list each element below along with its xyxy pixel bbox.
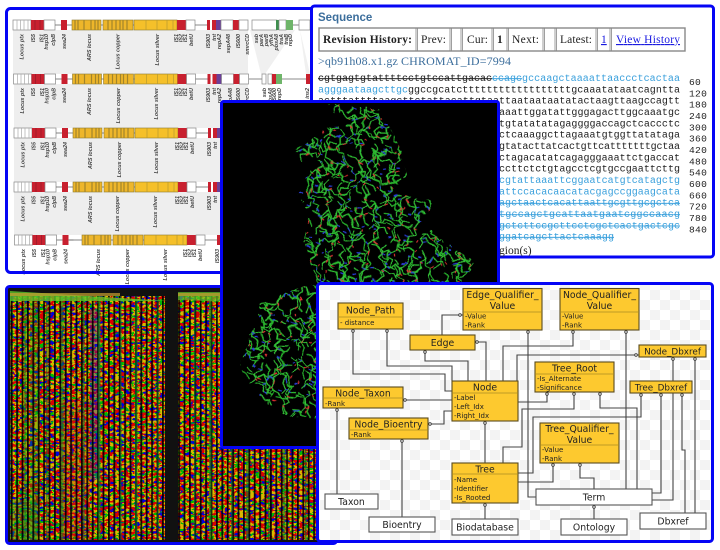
revision history table: Prev: (421, 34, 446, 46)
table: Tree: -Is_Rooted (454, 494, 490, 502)
row 4: tnt (213, 196, 219, 203)
row 2: IS600 (236, 88, 242, 102)
row 4: IS1 (40, 196, 46, 204)
row 2: IS903 (206, 88, 212, 102)
base position numbers: 780 (689, 213, 707, 224)
row 5: IS2 (188, 249, 194, 257)
row 2: pbsA8 (268, 88, 274, 105)
row 3: sea24 (63, 142, 69, 157)
sequence lines: tgccagctgcattaatgaatcggccaacg (499, 210, 680, 221)
row 1: parB (264, 34, 270, 47)
base position numbers: 180 (689, 100, 707, 111)
sequence lines: ggatcagcttactcaaagg (499, 233, 614, 244)
base position numbers: 120 (689, 88, 707, 99)
sequence lines: gccaagctaaaattaaccctcactaa (522, 74, 680, 85)
table: Term (536, 489, 652, 505)
table: Tree_Dbxref: Tree_Dbxref (634, 384, 688, 394)
row 3: Locus ptx (20, 141, 26, 167)
row 4: ARS locus (88, 196, 94, 224)
row 2: IS1 (183, 88, 189, 96)
row 4: IS903 (207, 196, 213, 210)
row 2: tnt (212, 88, 218, 95)
table: Taxon: Taxon (337, 497, 365, 508)
row 2: smrcCD (245, 88, 251, 109)
table: Dbxref: Dbxref (657, 516, 689, 528)
base position numbers (689, 77, 707, 236)
table: Node_Dbxref: Node_Dbxref (644, 348, 702, 358)
row 5: ARS locus (96, 249, 102, 277)
row 4: Locus ptx (20, 195, 26, 221)
table: Node_Taxon: Node_Taxon (335, 388, 391, 400)
sequence lines (318, 74, 680, 244)
row 4: clpB (52, 196, 58, 208)
sequence lines: ccagc (492, 74, 522, 85)
sequence lines: actttattttaagcttctattacattgtaattaataataatatactaagttaagccagtt (318, 97, 680, 108)
fasta header: >qb91h08.x1.gz CHROMAT_ID=7994 (318, 54, 511, 68)
table: Edge_Qualifier_Value: Value (490, 301, 516, 312)
row 3: ARS locus (88, 142, 94, 170)
row 1: IS1 (40, 34, 46, 42)
sequence lines: ctcaaaggcttagaaatgtggttatataga (499, 131, 680, 142)
row 4: hsp10 (45, 196, 51, 212)
row 3 (14, 128, 249, 177)
row 1: traB (284, 34, 290, 45)
table: Tree: -Name (454, 476, 477, 484)
row 4: Locus copper (115, 195, 121, 231)
row 1: Locus ptx (20, 33, 26, 59)
table: Node_Dbxref (639, 345, 706, 358)
row 1 (13, 20, 310, 69)
row 2: Locus ptx (20, 87, 26, 113)
grey homology bands (13, 30, 248, 235)
table: Node: -Right_Idx (454, 412, 489, 420)
row 3: IS2 (180, 142, 186, 150)
revision history table: 1 (497, 34, 503, 46)
protein lower lobe (240, 285, 325, 420)
row 5: hsp10 (46, 249, 52, 265)
row 2: ins2 (305, 88, 311, 99)
heatmap cells (10, 291, 318, 540)
panel: sequence record (312, 6, 714, 257)
connector end markers (336, 314, 696, 508)
row 2: sab (262, 87, 268, 97)
base position numbers: 840 (689, 224, 707, 236)
table: Node_Qualifier_Value: -Value (562, 312, 583, 320)
sequence lines: tgtatatatagaggggaccagctcaccctc (499, 119, 680, 130)
table: Node_Bioentry (349, 418, 428, 439)
base position numbers: 720 (689, 202, 707, 213)
table: Tree (452, 463, 518, 503)
row 1: Locus silver (155, 33, 161, 65)
row 1: Locus copper (116, 33, 122, 69)
table: Tree_Root: -Is_Alternate (537, 375, 581, 383)
row 5: IS1 (41, 249, 47, 257)
table: Bioentry: Bioentry (382, 520, 422, 531)
table: Term: Term (582, 492, 605, 504)
row 4 (14, 182, 249, 231)
row 1: IS1 (174, 34, 180, 42)
row 4: sea24 (63, 196, 69, 211)
row 2: IS5 (31, 87, 37, 96)
row 2: betU (189, 88, 195, 100)
row 1: IS903 (206, 34, 212, 48)
sequence lines: ctagacatatcagagggaaattctgaccat (499, 153, 680, 164)
table: Tree_Qualifier_Value (540, 423, 619, 463)
row 5 (14, 235, 258, 284)
table: Tree_Root: Tree_Root (551, 364, 597, 374)
sequence lines: ggccgcatcttttttttttttttttttgcaaatataatcagntta (408, 85, 680, 96)
row 4: betU (190, 196, 196, 208)
table: Biodatabase: Biodatabase (456, 522, 514, 534)
table: Edge (410, 335, 475, 350)
row 2: repA2 (217, 88, 223, 103)
sequence lines: aaattggatattgggagacttggcaaatgc (499, 108, 680, 119)
sequence lines: agggaataagcttgc (318, 85, 408, 96)
row 1: IS600 (236, 34, 242, 48)
table: Dbxref (640, 513, 706, 529)
table: Edge_Qualifier_Value: Edge_Qualifier_ (466, 290, 539, 301)
row 4: IS1 (184, 196, 190, 204)
panel: entity relationship diagram (318, 284, 712, 542)
base position numbers: 480 (689, 156, 707, 167)
sequence lines: gtatacttatcactgttcatttttttgctaa (499, 142, 680, 153)
sequence lines: agctaactcacattaattgcgttgcgctca (499, 199, 680, 210)
row 1: tnt (212, 34, 218, 41)
row 1: sab (254, 33, 260, 43)
panel border (6, 8, 318, 272)
table: Tree: Tree (474, 464, 495, 476)
sequence lines: cgtattaaattcggaatcatgtcatagctg (499, 176, 680, 187)
revision history table: Cur: (467, 34, 488, 46)
row 4: IS5 (32, 195, 38, 204)
table: Node_Qualifier_Value: Node_Qualifier_ (563, 290, 636, 301)
panel: protein structure (222, 102, 498, 448)
table: Node_Taxon: -Rank (325, 400, 346, 408)
row 2 (14, 74, 311, 123)
row 2: IS1 (40, 88, 46, 96)
table: Edge_Qualifier_Value (463, 288, 542, 330)
table: Tree_Root: -Significance (537, 384, 582, 392)
row 3: IS5 (32, 141, 38, 150)
row 2: IS600 (272, 88, 278, 102)
table: Biodatabase (452, 519, 518, 535)
row 1: IS1 (183, 34, 189, 42)
row 5: Locus ptx (21, 248, 27, 274)
table: Node_Path (338, 303, 403, 329)
table: Tree_Qualifier_Value: Tree_Qualifier_ (544, 424, 614, 435)
protein upper lobe (290, 107, 477, 283)
row 4: IS1 (175, 196, 181, 204)
row 3: IS903 (207, 142, 213, 156)
row 1: pbsA8 (274, 34, 280, 51)
row 1: smrcCD (245, 34, 251, 55)
base position numbers: 60 (689, 77, 701, 88)
panel: expression heatmap (6, 286, 336, 544)
row 2: sea24 (62, 88, 68, 103)
row 2: Locus silver (154, 87, 160, 119)
row 2: hsp10 (44, 88, 50, 104)
row 5: sea24 (64, 249, 70, 264)
table: Edge_Qualifier_Value: -Rank (465, 322, 486, 330)
table: Tree_Root (535, 362, 614, 392)
row 3: Locus copper (117, 141, 123, 177)
row 2: Locus copper (116, 87, 122, 123)
row 1: IS5 (31, 33, 37, 42)
base position numbers: 540 (689, 168, 707, 179)
row 3: hsp10 (45, 142, 51, 158)
row 1: clpB (51, 34, 57, 46)
table: Tree_Qualifier_Value: -Value (542, 446, 563, 454)
region note: gion(s) (499, 245, 532, 257)
table: Node_Path: Node_Path (346, 306, 395, 316)
row 3: betU (190, 142, 196, 154)
row 1: ARS locus (87, 34, 93, 62)
table: Node_Qualifier_Value: Value (587, 301, 613, 312)
row 2: clpB (52, 88, 58, 100)
table: Node_Bioentry: Node_Bioentry (354, 420, 423, 430)
table: Node: -Left_Idx (454, 403, 484, 411)
row 3: clpB (52, 142, 58, 154)
row 3: tnt (213, 142, 219, 149)
row 5: clpB (52, 249, 58, 261)
row 1: sepA48 (226, 34, 232, 53)
table: Edge: Edge (431, 338, 454, 349)
table: Tree: -Identifier (454, 485, 488, 493)
table: Bioentry (369, 517, 435, 532)
row 1: sea24 (62, 34, 68, 49)
row 5: IS903 (215, 249, 221, 263)
panel border (6, 286, 336, 544)
row 5: IS5 (32, 248, 38, 257)
revision history table (319, 28, 685, 51)
revision history table: 1 (601, 34, 607, 46)
table: Node_Bioentry: -Rank (351, 431, 372, 439)
table: Tree_Qualifier_Value: Value (567, 435, 593, 446)
row 4: Locus silver (153, 195, 159, 227)
row 1: repD (288, 34, 294, 46)
table: Node_Qualifier_Value: -Rank (562, 322, 583, 330)
row 5: Locus copper (125, 248, 131, 284)
base position numbers: 600 (689, 179, 707, 190)
base position numbers: 300 (689, 122, 707, 133)
base position numbers: 420 (689, 145, 707, 156)
connectors (337, 315, 695, 519)
table: Node_Taxon (323, 387, 403, 408)
sequence heading: Sequence (318, 12, 372, 24)
revision history table: View History (616, 34, 680, 46)
table: Node: Node (473, 382, 497, 394)
table: Taxon (325, 494, 378, 509)
table: Tree_Dbxref (630, 381, 692, 394)
sequence lines: cgtgagtgtattttcctgtccattgacac (318, 74, 492, 85)
sequence lines: gctcttccgcttcctcgctcactgactcgc (499, 221, 680, 232)
row 2: sepA48 (228, 88, 234, 107)
row 1: yfhA (269, 34, 275, 47)
row 5: IS1 (192, 249, 198, 257)
row 2: ARS locus (87, 88, 93, 116)
sequence lines: ccttctctgtagcctcgtgccgaattcttg (499, 165, 680, 176)
base position numbers: 360 (689, 134, 707, 145)
row 5: betU (198, 249, 204, 261)
panel: genome loci comparison (6, 8, 318, 284)
row 1: betU (189, 34, 195, 46)
table: Edge_Qualifier_Value: -Value (465, 312, 486, 320)
row 1: repA2 (217, 34, 223, 49)
row 1: hsp10 (44, 34, 50, 50)
table: Node_Qualifier_Value (560, 288, 639, 330)
table: Node_Path: - distance (340, 319, 374, 327)
table: Tree_Qualifier_Value: -Rank (542, 455, 563, 463)
table: Ontology (561, 519, 627, 535)
table: Ontology: Ontology (573, 522, 616, 534)
sequence lines: attccacacaacatacgagccggaagcata (499, 187, 680, 198)
table: Node (452, 381, 518, 421)
row 1: traA (279, 34, 285, 45)
row 3: IS1 (184, 142, 190, 150)
row 5: Locus silver (163, 248, 169, 280)
row 2: repD (277, 88, 283, 100)
base position numbers: 240 (689, 111, 707, 122)
row 4: IS2 (180, 196, 186, 204)
base position numbers: 660 (689, 190, 707, 201)
row 3: Locus silver (154, 141, 160, 173)
revision history table: Next: (512, 34, 539, 46)
revision history table: Revision History: (323, 34, 412, 46)
row 2: IS1 (174, 88, 180, 96)
row 5: IS1 (183, 249, 189, 257)
homology fan (250, 30, 310, 74)
row 3: IS1 (40, 142, 46, 150)
row 3: IS1 (175, 142, 181, 150)
row 1: IS2 (178, 34, 184, 42)
revision history table: Latest: (560, 34, 592, 46)
table: Node: -Label (454, 394, 475, 402)
row 2: IS2 (178, 88, 184, 96)
row 1: parA (259, 34, 265, 47)
